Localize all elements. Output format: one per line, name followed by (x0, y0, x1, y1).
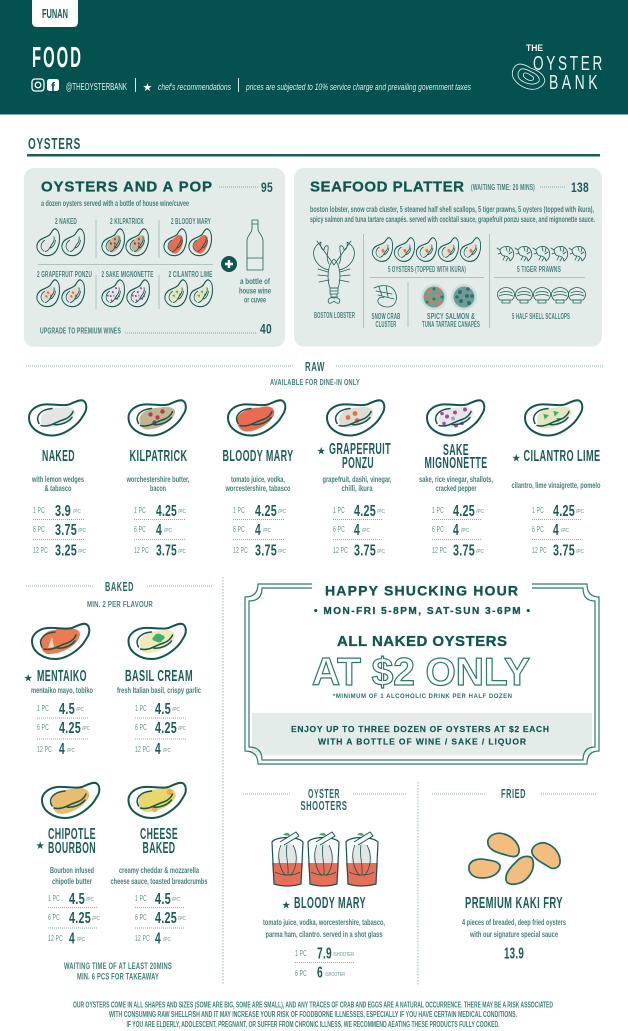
icon: shooter glasses (272, 832, 378, 886)
caption: canapes: SPICY SALMON & (427, 312, 475, 321)
item: cilantro lime: ★ (512, 452, 521, 464)
item: chipotle bourbon: 6 PC (48, 912, 60, 922)
panel price: 95 (261, 179, 273, 195)
promo offer: WITH A BOTTLE OF WINE / SAKE / LIQUOR (318, 736, 526, 746)
item: sake mignonette: 4 (453, 522, 459, 539)
item: cheese baked: creamy cheddar & mozzarella (119, 865, 199, 875)
oyster pairs (33, 228, 220, 311)
fried heading: FRIED (501, 787, 526, 801)
item: bloody mary: 3.75 (255, 542, 277, 560)
bottle caption: or cuvee (244, 294, 266, 304)
baked heading: MIN. 2 PER FLAVOUR (87, 600, 153, 609)
upgrade line (40, 320, 272, 336)
promo footnote: *MINIMUM OF 1 ALCOHOLIC DRINK PER HALF DOZEN (333, 694, 512, 700)
item: sake mignonette: MIGNONETTE (424, 455, 488, 472)
waiting time: (WAITING TIME: 20 MINS) (471, 183, 535, 192)
bottle caption: house wine (239, 286, 271, 296)
icon: scallops (497, 288, 586, 303)
item: kilpatrick: /PC (178, 509, 186, 515)
item: grapefruit ponzu (316, 400, 392, 560)
item: bloody mary: /PC (263, 528, 271, 534)
item: naked: 6 PC (33, 524, 45, 534)
item: sake mignonette: 3.75 (453, 542, 475, 560)
item: kilpatrick: 3.75 (156, 542, 177, 560)
item: grapefruit ponzu: 4 (354, 522, 360, 539)
panel: happy shucking hour (245, 582, 599, 764)
baked heading: BAKED (105, 580, 134, 594)
item: chipotle bourbon: 4.25 (69, 910, 91, 927)
item: grapefruit ponzu: /PC (377, 549, 385, 555)
oyster pair labels: 2 NAKED (55, 217, 77, 226)
item: chipotle bourbon: /PC (77, 937, 85, 943)
item: cilantro lime: 4 (553, 522, 559, 539)
item: cheese baked: /PC (163, 937, 171, 943)
icon: tiger prawns (497, 246, 586, 261)
item: chipotle bourbon (36, 783, 100, 948)
item: basil cream: /PC (163, 748, 171, 754)
item: sake mignonette: sake, rice vinegar, shallots, (419, 474, 493, 484)
bottom caption: lobster: BOSTON LOBSTER (314, 311, 355, 320)
item: grapefruit ponzu: 6 PC (333, 524, 345, 534)
item: sake mignonette: 4.25 (453, 503, 475, 520)
panel: seafood platter (294, 168, 602, 346)
item: kilpatrick (126, 400, 190, 560)
icon: lobster (314, 241, 354, 303)
bottle caption (239, 276, 271, 304)
item: grapefruit ponzu: ★ (316, 446, 326, 458)
caption: snow crab: CLUSTER (376, 320, 396, 329)
item: premium kaki fry: 13.9 (504, 946, 524, 962)
item: bloody mary shooter (263, 895, 385, 982)
bottle caption: a bottle of (240, 276, 270, 286)
icon: plus (221, 256, 237, 272)
item: bloody mary: 4 (255, 522, 261, 539)
item: bloody mary shooter: 7.9 (317, 946, 332, 962)
raw heading: AVAILABLE FOR DINE-IN ONLY (270, 378, 360, 387)
item: chipotle bourbon: 4.5 (69, 891, 85, 908)
item: bloody mary shooter: tomato juice, vodka, worcestershire, tabasco, (263, 917, 385, 927)
icon: tuna canape (451, 284, 477, 310)
item: cilantro lime: /PC (576, 509, 584, 515)
item: bloody mary shooter: /SHOOTER (325, 972, 345, 978)
panel title: OYSTERS AND A POP (41, 178, 212, 196)
item: kilpatrick: worchestershire butter, (126, 474, 190, 484)
item: grapefruit ponzu: /PC (362, 528, 370, 534)
item: chipotle bourbon: BOURBON (48, 840, 96, 857)
item: kilpatrick: 4 (156, 522, 162, 539)
chef's recommendations: chef's recommendations (158, 82, 231, 93)
item: bloody mary shooter: parma ham, cilantro. served in a shot glass (266, 929, 383, 939)
baked heading (26, 580, 213, 609)
upgrade line: 40 (260, 320, 272, 336)
item: cheese baked: 6 PC (135, 912, 147, 922)
item: grapefruit ponzu: 4.25 (354, 503, 376, 520)
item: naked: 3.9 (55, 503, 71, 520)
item: cheese baked: 12 PC (135, 933, 150, 943)
baked note: WAITING TIME OF AT LEAST 20MINS (64, 961, 172, 971)
item: naked: /PC (78, 549, 86, 555)
item: naked: 12 PC (33, 545, 48, 555)
raw heading (26, 360, 603, 387)
baked note (64, 961, 172, 982)
item: cilantro lime: 6 PC (532, 524, 544, 534)
item: mentaiko: 12 PC (37, 744, 52, 754)
oyster pair labels: 2 GRAPEFRUIT PONZU (37, 270, 92, 279)
item: kilpatrick: 4.25 (156, 503, 177, 520)
item: kilpatrick: KILPATRICK (130, 448, 188, 465)
item: mentaiko: 6 PC (37, 722, 49, 732)
promo offer: ENJOY UP TO THREE DOZEN OF OYSTERS AT $2 EACH (291, 724, 549, 734)
tax note: prices are subjected to 10% service charge and prevailing government taxes (245, 82, 471, 93)
social handle: @THEOYSTERBANK (66, 82, 127, 93)
item: cheese baked: /PC (178, 916, 186, 922)
item: basil cream: /PC (172, 707, 180, 713)
icon: wine bottle (247, 220, 263, 270)
item: mentaiko: 4 (59, 741, 65, 758)
caption: snow crab (372, 312, 400, 329)
item: cheese baked: 1 PC (135, 893, 147, 903)
item: bloody mary: 4.25 (255, 503, 277, 520)
item: grapefruit ponzu: chilli, ikura (342, 483, 373, 493)
item: chipotle bourbon: 4 (69, 930, 75, 948)
promo offer (291, 724, 549, 746)
item: bloody mary shooter: BLOODY MARY (294, 895, 366, 912)
item: cheese baked: /PC (172, 897, 180, 903)
item: mentaiko: 1 PC (37, 703, 49, 713)
item: basil cream (117, 624, 201, 758)
item: cheese baked: 4 (155, 930, 161, 948)
caption: oysters: 5 OYSTERS (TOPPED WITH IKURA) (388, 265, 466, 274)
item: sake mignonette: SAKE (443, 442, 469, 459)
caption: canapes (422, 312, 480, 329)
panel title: SEAFOOD PLATTER (310, 178, 464, 196)
item: bloody mary (222, 400, 294, 560)
item: grapefruit ponzu: 12 PC (333, 545, 348, 555)
baked note: MIN. 6 PCS FOR TAKEAWAY (77, 972, 159, 982)
item: grapefruit ponzu: 1 PC (333, 505, 345, 515)
item: chipotle bourbon: 1 PC (48, 893, 60, 903)
oyster shooters heading: SHOOTERS (300, 799, 348, 813)
item: sake mignonette (419, 400, 493, 560)
item: bloody mary: /PC (278, 549, 286, 555)
item: bloody mary: worcestershire, tabasco (225, 483, 290, 493)
promo hours: • MON-FRI 5-8PM, SAT-SUN 3-6PM • (314, 606, 530, 617)
promo price outline: AT $2 ONLY (312, 651, 530, 694)
item: bloody mary: /PC (278, 509, 286, 515)
item: cilantro lime: 12 PC (532, 545, 547, 555)
item: basil cream: fresh Italian basil, crispy garlic (117, 685, 201, 695)
item: cilantro lime: 3.75 (553, 542, 575, 560)
item: grapefruit ponzu: grapefruit, dashi, vinegar, (322, 474, 392, 484)
item: bloody mary: BLOODY MARY (222, 448, 294, 465)
item: kilpatrick: 6 PC (134, 524, 146, 534)
item: mentaiko: 4.25 (59, 720, 81, 737)
item: mentaiko: ★ (24, 672, 33, 684)
item: mentaiko: /PC (76, 707, 84, 713)
item: mentaiko: /PC (67, 748, 75, 754)
icon: snow crab (374, 286, 396, 307)
oyster pair labels: 2 BLOODY MARY (171, 217, 211, 226)
item: kilpatrick: /PC (164, 528, 172, 534)
icon: facebook: f (51, 80, 56, 94)
panel price: 138 (571, 179, 589, 195)
item: cilantro lime: 4.25 (553, 503, 575, 520)
item: mentaiko: /PC (82, 726, 90, 732)
item: bloody mary shooter: ★ (282, 900, 291, 912)
item: basil cream: /PC (178, 726, 186, 732)
raw heading: RAW (305, 360, 325, 374)
item: bloody mary shooter: /SHOOTER (333, 952, 354, 958)
item: kilpatrick: 12 PC (134, 545, 149, 555)
section heading: oysters: OYSTERS (28, 136, 81, 153)
item: sake mignonette: 6 PC (432, 524, 444, 534)
page title: FOOD (32, 42, 83, 74)
item: grapefruit ponzu: 3.75 (354, 542, 376, 560)
item: mentaiko (24, 624, 93, 758)
item: cilantro lime: /PC (561, 528, 569, 534)
item: cheese baked: CHEESE (140, 826, 178, 843)
caption: scallops: 5 HALF SHELL SCALLOPS (512, 312, 570, 321)
item: bloody mary shooter: 6 (317, 964, 323, 982)
item: basil cream: BASIL CREAM (125, 668, 193, 685)
oyster shooters heading (243, 787, 406, 813)
item: sake mignonette: /PC (476, 549, 484, 555)
item: basil cream: 1 PC (135, 703, 147, 713)
caption: prawns: 5 TIGER PRAWNS (517, 265, 561, 274)
item: basil cream: 4.5 (155, 701, 171, 718)
item: cheese baked: BAKED (142, 840, 176, 857)
upgrade line: UPGRADE TO PREMIUM WINES (40, 326, 121, 336)
five ikura oysters (369, 237, 487, 265)
item: cilantro lime (512, 400, 600, 560)
location tab (32, 0, 78, 27)
item: bloody mary shooter: 6 PC (295, 968, 307, 978)
item: bloody mary shooter: 1 PC (295, 948, 307, 958)
item: premium kaki fry: 4 pieces of breaded, deep fried oysters (462, 917, 566, 927)
header band (0, 0, 628, 114)
logo (508, 43, 605, 96)
item: naked: /PC (78, 528, 86, 534)
item: mentaiko: mentaiko mayo, tobiko (31, 685, 93, 695)
item: sake mignonette: 1 PC (432, 505, 444, 515)
item: grapefruit ponzu: GRAPEFRUIT (329, 441, 391, 458)
footer disclaimer (73, 1000, 553, 1029)
item: sake mignonette: /PC (461, 528, 469, 534)
logo: THE (526, 43, 543, 53)
panel description (310, 205, 595, 224)
item: chipotle bourbon: ★ (36, 840, 45, 852)
gray band (252, 713, 592, 756)
item: chipotle bourbon: CHIPOTLE (48, 826, 96, 843)
item: chipotle bourbon: /PC (92, 916, 100, 922)
item: cilantro lime: /PC (576, 549, 584, 555)
item: bloody mary: 12 PC (233, 545, 248, 555)
item: naked: & tabasco (44, 483, 72, 493)
icon: fried oysters (469, 833, 560, 884)
item: kilpatrick: /PC (178, 549, 186, 555)
item: bloody mary: tomato juice, vodka, (231, 474, 285, 484)
promo heading: HAPPY SHUCKING HOUR (325, 582, 518, 598)
icon: facebook (47, 79, 59, 94)
item: basil cream: 12 PC (135, 744, 150, 754)
panel subtitle: a dozen oysters served with a bottle of house wine/cuvee (41, 198, 189, 208)
oyster pair labels (37, 217, 213, 279)
item: naked: 3.75 (55, 522, 77, 539)
item: cilantro lime: 1 PC (532, 505, 544, 515)
item: premium kaki fry: PREMIUM KAKI FRY (465, 895, 563, 912)
oyster pair labels: 2 SAKE MIGNONETTE (102, 270, 154, 279)
item: chipotle bourbon: Bourbon infused (50, 865, 94, 875)
item: premium kaki fry: with our signature special sauce (469, 929, 558, 939)
item: chipotle bourbon: 12 PC (48, 933, 63, 943)
item: naked: /PC (73, 509, 81, 515)
item: grapefruit ponzu: PONZU (342, 455, 374, 472)
item: sake mignonette: /PC (476, 509, 484, 515)
icon: instagram (32, 79, 44, 91)
item: grapefruit ponzu: /PC (377, 509, 385, 515)
item: sake mignonette: 12 PC (432, 545, 447, 555)
oyster shooters heading: OYSTER (308, 787, 340, 801)
item: chipotle bourbon: chipotle butter (52, 876, 92, 886)
oyster pair labels: 2 KILPATRICK (110, 217, 144, 226)
item: naked: 3.25 (55, 542, 77, 560)
item: mentaiko: MENTAIKO (37, 668, 87, 685)
item: kilpatrick: 1 PC (134, 505, 146, 515)
item: naked: NAKED (42, 448, 75, 465)
item: sake mignonette: cracked pepper (436, 483, 477, 493)
item: premium kaki fry (462, 895, 566, 962)
item: naked: with lemon wedges (31, 474, 84, 484)
item: naked: 1 PC (33, 505, 45, 515)
icon: star: ★ (142, 81, 152, 94)
icon: spicy salmon canape (421, 284, 447, 310)
item: cheese baked (110, 783, 208, 948)
item: bloody mary: 6 PC (233, 524, 245, 534)
promo line: ALL NAKED OYSTERS (337, 633, 507, 650)
location tab: FUNAN (42, 6, 68, 21)
item: basil cream: 4 (155, 741, 161, 758)
caption: canapes: TUNA TARTARE CANAPÉS (422, 320, 480, 329)
item: cheese baked: 4.25 (155, 910, 177, 927)
item: mentaiko: 4.5 (59, 701, 75, 718)
double frame (245, 584, 599, 764)
item: basil cream: 6 PC (135, 722, 147, 732)
item: bloody mary: 1 PC (233, 505, 245, 515)
item: naked (29, 400, 86, 560)
oyster pair labels: 2 CILANTRO LIME (168, 270, 213, 279)
item: cheese baked: cheese sauce, toasted breadcrumbs (110, 876, 208, 886)
panel: oysters and a pop (24, 168, 285, 347)
logo: BANK (549, 72, 601, 94)
caption: snow crab: SNOW CRAB (372, 312, 400, 321)
item: cheese baked: 4.5 (155, 891, 171, 908)
item: basil cream: 4.25 (155, 720, 177, 737)
item: chipotle bourbon: /PC (86, 897, 94, 903)
item: kilpatrick: bacon (150, 483, 166, 493)
